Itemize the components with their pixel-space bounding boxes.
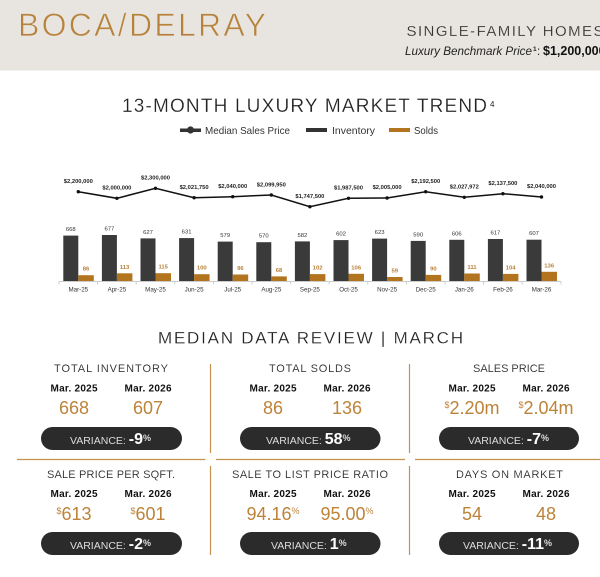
solds labels: 136 (544, 263, 555, 269)
solds labels: 106 (351, 265, 362, 271)
solds labels: 111 (467, 265, 477, 271)
variance pill (240, 532, 380, 555)
inventory labels: 668 (66, 227, 76, 233)
variance pill: VARIANCE: -7 (468, 431, 541, 448)
panel: sale to list price ratio (232, 469, 388, 555)
solds labels (83, 263, 555, 274)
inventory bars (63, 235, 542, 281)
panel: days on market: Mar. 2025 (448, 489, 496, 500)
solds labels: 102 (313, 266, 323, 272)
combo chart: median price line with inventory and solds bars (59, 176, 561, 294)
panel: total solds: Mar. 2025 (250, 384, 297, 394)
panel: total solds (240, 363, 380, 450)
inventory labels: 590 (413, 232, 424, 238)
solds labels: 100 (197, 266, 207, 272)
panel: days on market (439, 469, 579, 555)
luxury benchmark price (405, 44, 600, 58)
variance pill: % (343, 433, 351, 443)
header band (0, 0, 600, 70)
panel: total solds: TOTAL SOLDS (269, 363, 351, 375)
month labels: Apr-25 (108, 286, 127, 294)
month labels: Oct-25 (339, 286, 358, 294)
luxury benchmark price: 1 (533, 46, 537, 53)
variance pill: VARIANCE: -2 (70, 536, 143, 553)
panel: sale to list price ratio: 94.16 (246, 504, 292, 524)
variance pill (439, 427, 579, 450)
variance pill: % (339, 538, 347, 548)
month labels: Nov-25 (377, 286, 398, 294)
variance pill: % (541, 433, 549, 443)
price labels: $2,137,500 (488, 181, 517, 187)
panel: total inventory (41, 363, 182, 450)
inventory labels: 627 (143, 230, 153, 236)
price labels: $2,192,500 (411, 179, 440, 185)
variance pill: VARIANCE: 58 (266, 431, 343, 448)
variance pill (41, 427, 182, 450)
month labels: May-25 (145, 286, 166, 294)
panel: sale to list price ratio: Mar. 2025 (250, 489, 297, 500)
solds labels: 113 (120, 265, 130, 271)
solds labels: 86 (83, 267, 90, 273)
month labels: Aug-25 (261, 286, 282, 294)
solds labels: 104 (506, 265, 516, 271)
variance pill: VARIANCE: -11 (463, 536, 544, 553)
panel: sales price: 2.20m (449, 398, 500, 418)
panel: days on market: 48 (536, 504, 556, 524)
panel: days on market: 54 (462, 504, 482, 524)
variance pill (240, 427, 380, 450)
inventory labels: 607 (529, 231, 539, 237)
price labels: $1,747,500 (295, 194, 324, 200)
price labels: $1,987,500 (334, 186, 363, 192)
panel: total solds: 136 (332, 398, 362, 418)
panel: total inventory: Mar. 2025 (50, 384, 98, 394)
price labels: $2,027,972 (450, 184, 479, 190)
inventory labels: 602 (336, 232, 346, 238)
panel: sale price per sqft: 601 (135, 504, 166, 524)
inventory labels: 617 (490, 230, 500, 236)
solds bars (78, 272, 557, 281)
month labels: Jan-26 (455, 286, 474, 294)
panel: sales price: Mar. 2026 (522, 384, 570, 394)
luxury benchmark price: : (537, 46, 540, 58)
panel: total inventory: 607 (133, 398, 163, 418)
chart legend (180, 125, 438, 137)
panel: sale price per sqft: $ (130, 506, 135, 516)
inventory labels: 623 (375, 230, 385, 236)
panel: total solds: 86 (263, 398, 283, 418)
solds labels: 96 (237, 266, 244, 272)
inventory labels: 606 (452, 231, 462, 237)
variance pill: % (143, 538, 151, 548)
panel: total inventory: 668 (59, 398, 89, 418)
panel: sale to list price ratio: % (366, 506, 374, 516)
month labels: Mar-26 (532, 286, 552, 294)
solds labels: 68 (276, 268, 283, 274)
price labels: $2,040,000 (218, 184, 247, 190)
panel: sales price: SALES PRICE (473, 363, 545, 375)
panel: sales price: $ (444, 400, 449, 410)
title: Boca/Delray: BOCA/DELRAY (18, 7, 266, 43)
panel: sales price (439, 363, 579, 450)
heading: median data review: MEDIAN DATA REVIEW | MARCH (158, 328, 463, 348)
panel: sales price: $ (518, 400, 523, 410)
chart legend: Median Sales Price (205, 125, 290, 137)
panel: total solds: Mar. 2026 (324, 384, 371, 394)
month labels (68, 286, 552, 294)
solds labels: 59 (392, 268, 399, 274)
subtitle: single-family homes: SINGLE-FAMILY HOMES (406, 23, 600, 40)
panel: days on market: Mar. 2026 (522, 489, 570, 500)
variance pill: VARIANCE: -9 (70, 431, 143, 448)
chart legend: Inventory (332, 125, 376, 137)
panel: total inventory: TOTAL INVENTORY (54, 363, 169, 375)
panel: sale price per sqft: 613 (61, 504, 92, 524)
heading: 13-month trend: 13-MONTH LUXURY MARKET TREND (122, 96, 487, 117)
inventory labels: 570 (259, 234, 269, 240)
price labels: $2,005,000 (373, 185, 402, 191)
month labels: Jul-25 (224, 286, 242, 294)
panel: sale price per sqft: $ (56, 506, 61, 516)
panel: sale to list price ratio: SALE TO LIST PRICE RATIO (232, 469, 388, 481)
price labels: $2,099,950 (257, 182, 286, 188)
inventory labels: 579 (220, 233, 230, 239)
panel: sales price: 2.04m (523, 398, 574, 418)
panel: sale price per sqft: Mar. 2026 (124, 489, 172, 500)
solds labels: 115 (158, 265, 169, 271)
price labels: $2,021,750 (180, 185, 209, 191)
month labels: Mar-25 (68, 286, 89, 294)
month labels: Dec-25 (416, 286, 436, 294)
variance pill (41, 532, 182, 555)
inventory labels: 631 (182, 230, 192, 236)
variance pill: VARIANCE: 1 (271, 536, 339, 553)
panel: sale price per sqft (41, 469, 182, 555)
chart axis (59, 282, 561, 284)
price labels: $2,040,000 (527, 184, 556, 190)
inventory labels (66, 226, 539, 240)
month labels: Sep-25 (300, 286, 320, 294)
heading: 13-month trend: 4 (490, 100, 495, 109)
month labels: Feb-26 (493, 286, 513, 294)
median price line (77, 187, 543, 208)
price labels: $2,000,000 (102, 186, 131, 192)
variance pill: % (143, 433, 151, 443)
variance pill (439, 532, 579, 555)
panel: sale to list price ratio: % (292, 506, 300, 516)
panel: sale to list price ratio: Mar. 2026 (324, 489, 371, 500)
price labels: $2,200,000 (64, 179, 93, 185)
panel: sale price per sqft: Mar. 2025 (50, 489, 98, 500)
solds labels: 90 (430, 266, 437, 272)
price labels: $2,300,000 (141, 176, 170, 182)
luxury benchmark price: Luxury Benchmark Price (405, 46, 532, 58)
variance pill: % (544, 538, 552, 548)
panel: sale to list price ratio: 95.00 (320, 504, 366, 524)
chart legend: Solds (414, 125, 438, 137)
panel: sales price: Mar. 2025 (448, 384, 496, 394)
month labels: Jun-25 (185, 286, 204, 294)
panel: sale price per sqft: SALE PRICE PER SQFT. (47, 469, 175, 481)
panel: total inventory: Mar. 2026 (124, 384, 172, 394)
inventory labels: 677 (104, 226, 114, 232)
panel: days on market: DAYS ON MARKET (456, 469, 563, 481)
price labels (64, 176, 556, 200)
inventory labels: 582 (297, 233, 307, 239)
